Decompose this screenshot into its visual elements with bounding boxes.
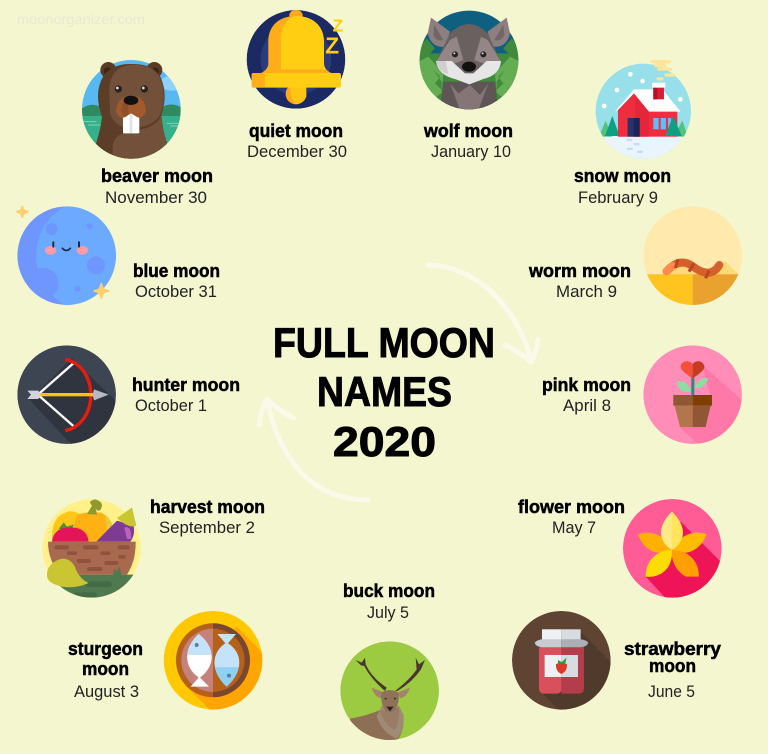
- label: blue moon: October 31: [135, 283, 217, 301]
- label: sturgeon moon: August 3: [74, 683, 139, 701]
- label: quiet moon: quiet moon: [249, 121, 343, 141]
- label: snow moon: February 9: [578, 189, 658, 207]
- icon: wolf: [418, 10, 520, 112]
- label: buck moon: July 5: [367, 604, 409, 622]
- panel: snow moon: [574, 60, 692, 207]
- icon: bell: [247, 10, 345, 109]
- label: worm moon: [528, 261, 631, 301]
- icon: blue moon face: [16, 206, 116, 305]
- icon: bell: Z: [325, 33, 339, 59]
- panel: flower moon: [518, 497, 724, 600]
- label: hunter moon: hunter moon: [132, 375, 240, 395]
- panel: wolf moon: [418, 10, 520, 161]
- label: buck moon: buck moon: [343, 581, 435, 601]
- panel: sturgeon moon: [68, 611, 267, 713]
- label: blue moon: blue moon: [133, 261, 220, 281]
- label: pink moon: April 8: [563, 397, 611, 415]
- panel: pink moon: [542, 345, 744, 445]
- label: hunter moon: [132, 375, 240, 415]
- panel: blue moon: [16, 206, 220, 305]
- label: quiet moon: [247, 121, 347, 161]
- title: FULL MOON: [273, 319, 495, 366]
- icon: worm: [641, 203, 744, 308]
- label: harvest moon: [150, 497, 265, 537]
- label: pink moon: pink moon: [542, 375, 631, 395]
- panel: beaver moon: [80, 57, 213, 207]
- label: worm moon: March 9: [556, 283, 617, 301]
- label: snow moon: snow moon: [574, 166, 671, 186]
- label: strawberry moon: moon: [649, 656, 696, 676]
- label: flower moon: May 7: [552, 519, 596, 537]
- icon: bell: Z: [333, 16, 344, 36]
- label: strawberry moon: strawberry: [624, 639, 721, 659]
- panel: hunter moon: [17, 345, 240, 445]
- label: pink moon: [542, 375, 631, 415]
- label: wolf moon: [423, 121, 513, 161]
- panel: quiet moon: [247, 10, 347, 161]
- label: buck moon: [343, 581, 435, 622]
- title: [273, 319, 495, 465]
- label: beaver moon: [101, 166, 213, 207]
- label: sturgeon moon: moon: [82, 659, 129, 679]
- panel: worm moon: [528, 203, 744, 308]
- title: NAMES: [317, 368, 452, 415]
- label: harvest moon: September 2: [159, 519, 255, 537]
- watermark: moonorganizer.com: [17, 12, 145, 27]
- label: blue moon: [133, 261, 220, 301]
- label: quiet moon: December 30: [247, 143, 347, 161]
- label: worm moon: worm moon: [528, 261, 631, 281]
- label: flower moon: [518, 497, 625, 537]
- label: sturgeon moon: [68, 639, 143, 701]
- label: harvest moon: harvest moon: [150, 497, 265, 517]
- label: snow moon: [574, 166, 671, 207]
- label: strawberry moon: June 5: [648, 683, 695, 701]
- icon: fish plate: [164, 611, 267, 713]
- label: flower moon: flower moon: [518, 497, 625, 517]
- arrow: top right clockwise: [428, 265, 538, 362]
- icon: potted heart plant: [643, 345, 744, 445]
- label: strawberry moon: [624, 639, 721, 701]
- icon: beaver: [80, 57, 183, 160]
- label: beaver moon: beaver moon: [101, 166, 213, 186]
- icon: bow and arrow: [17, 345, 117, 445]
- title: 2020: [333, 418, 436, 465]
- panel: harvest moon: [40, 497, 265, 600]
- label: wolf moon: wolf moon: [423, 121, 513, 141]
- label: beaver moon: November 30: [105, 189, 207, 207]
- arrow: bottom left clockwise: [259, 399, 368, 500]
- icon: deer: [340, 641, 439, 741]
- icon: vegetable basket: [40, 499, 144, 600]
- icon: flower: [623, 499, 724, 600]
- panel: strawberry moon: [512, 611, 721, 713]
- panel: buck moon: [340, 581, 439, 741]
- icon: jam jar: [512, 611, 617, 713]
- label: hunter moon: October 1: [135, 397, 207, 415]
- label: sturgeon moon: sturgeon: [68, 639, 143, 659]
- icon: snowy house: [594, 60, 692, 162]
- label: wolf moon: January 10: [431, 143, 511, 161]
